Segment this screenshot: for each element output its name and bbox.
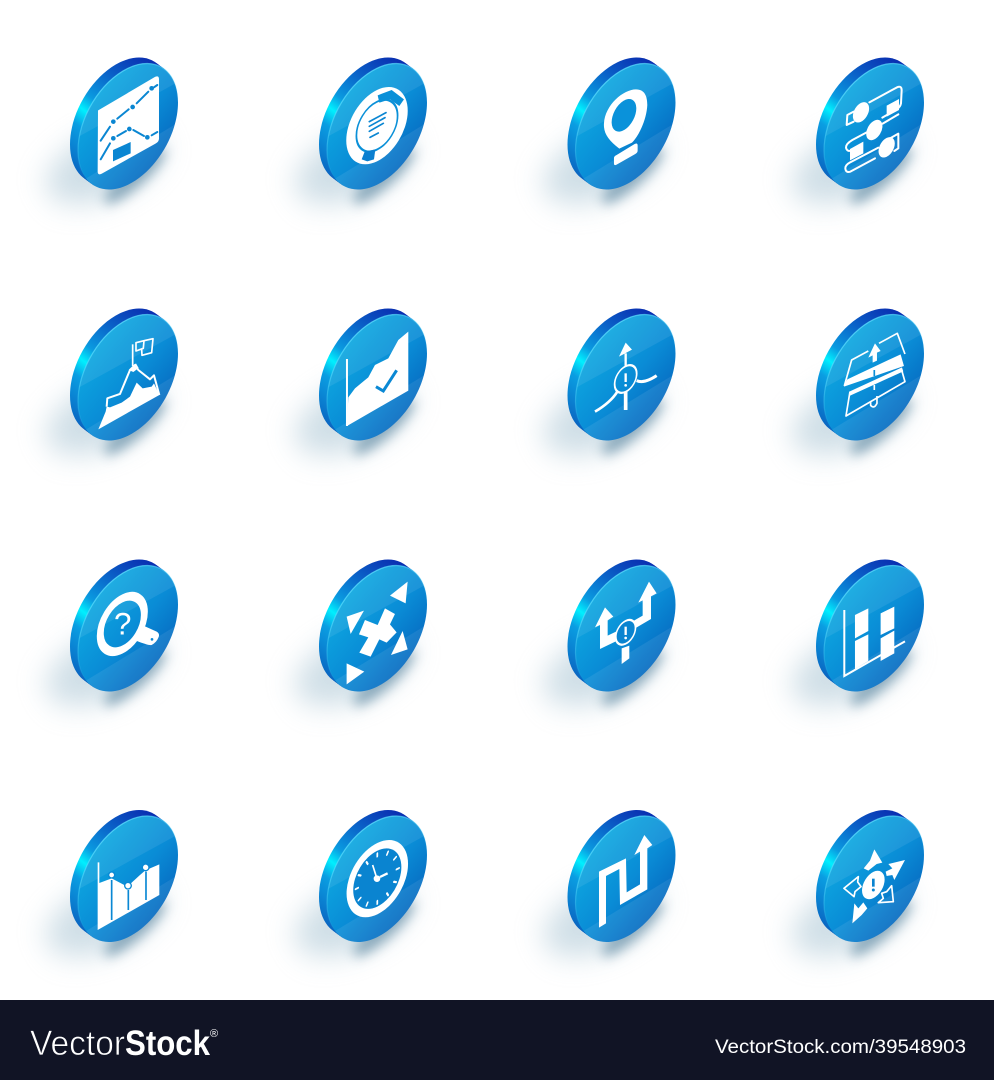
- icon: map pin: [532, 46, 686, 220]
- icon: circular dial with document: [283, 46, 437, 220]
- icon: exclamation with four arrows: [780, 799, 934, 973]
- icon: wall clock: [283, 799, 437, 973]
- icon: forked arrows with exclamation: [532, 548, 686, 722]
- icon: cross with four triangles: [283, 548, 437, 722]
- icon: area chart with markers: [34, 799, 188, 973]
- icon: magnifier with question mark: [34, 548, 188, 722]
- icon: layered road sign with arrow: [780, 298, 934, 471]
- icon: mountain with flag: [34, 298, 188, 471]
- icon: sliders: [780, 46, 934, 220]
- footer logo: Stock: [125, 1024, 210, 1063]
- icon: line chart board: [34, 46, 188, 220]
- footer logo: ®: [210, 1028, 218, 1040]
- icon: winding path arrow: [532, 799, 686, 973]
- footer logo: Vector: [30, 1024, 125, 1063]
- icon: bar chart: [780, 548, 934, 722]
- footer logo: [30, 1024, 218, 1063]
- footer url: VectorStock.com/39548903: [715, 1037, 966, 1058]
- icon: magnifier with question mark: ?: [114, 606, 131, 641]
- icon: crossroad with exclamation: [532, 298, 686, 471]
- footer bar: [0, 1000, 994, 1080]
- icon: area chart with check mark: [283, 298, 437, 471]
